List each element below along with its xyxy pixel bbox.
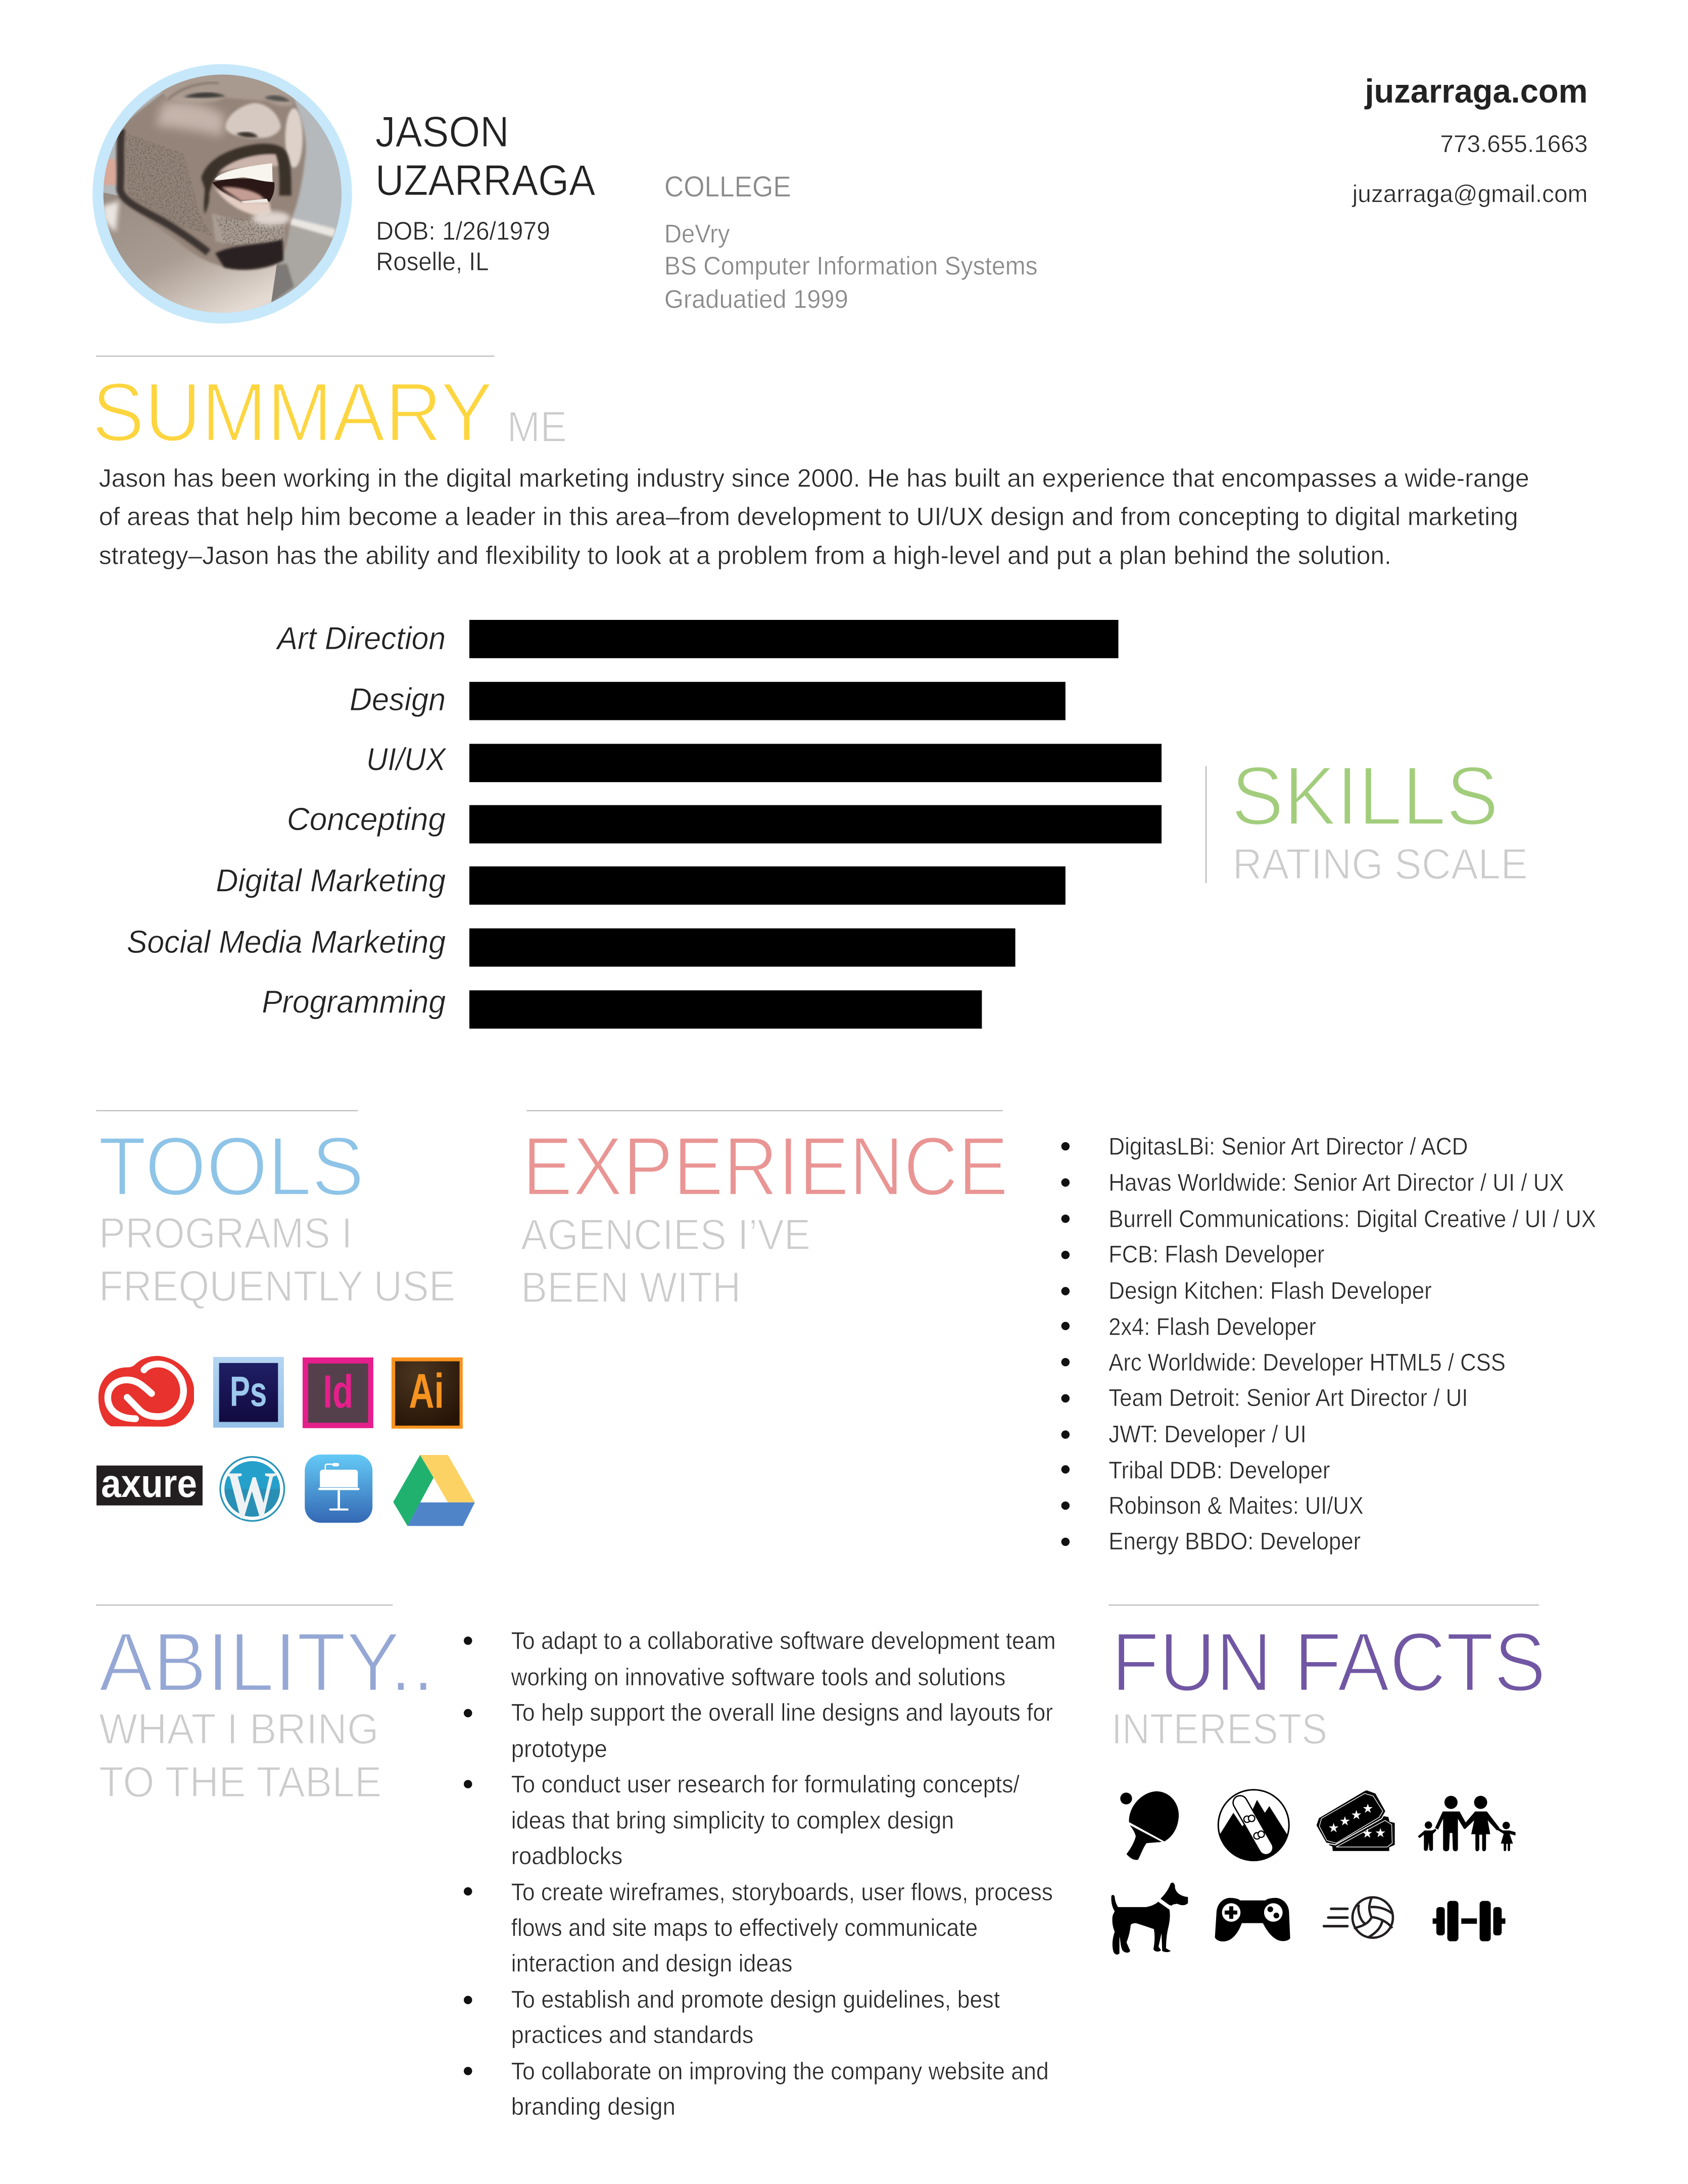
heading: ability: TO THE TABLE — [99, 1758, 381, 1806]
name: UZARRAGA — [375, 157, 595, 205]
skills bar chart: Digital Marketing — [216, 863, 446, 899]
skills bar chart: Social Media Marketing — [127, 925, 446, 960]
photo: laughing portrait in blue ring — [92, 64, 352, 324]
heading: ability: WHAT I BRING — [99, 1706, 379, 1754]
skills bar chart: Design — [350, 682, 446, 717]
skills bar chart: UI/UX — [366, 742, 447, 778]
heading: skills: RATING SCALE — [1233, 841, 1528, 889]
experience list: FCB: Flash Developer — [1108, 1241, 1325, 1268]
summary paragraph — [99, 464, 1529, 570]
tool icons — [97, 1356, 475, 1532]
icon: ping pong paddle — [1120, 1791, 1179, 1860]
name: JASON — [375, 108, 509, 156]
heading: experience: BEEN WITH — [521, 1264, 741, 1312]
experience list: Design Kitchen: Flash Developer — [1108, 1277, 1432, 1304]
experience list: Burrell Communications: Digital Creative / UI / UX — [1108, 1205, 1596, 1233]
tool icons: second column pair — [303, 1357, 475, 1526]
icon: illustrator — [392, 1357, 463, 1429]
heading: tools: TOOLS — [98, 1120, 364, 1213]
heading: fun facts — [1112, 1616, 1546, 1754]
date of birth and location — [376, 216, 550, 276]
skills bar chart: Concepting — [287, 802, 446, 837]
ability list: To collaborate on improving the company website and — [511, 2058, 1049, 2085]
heading: experience — [521, 1120, 1008, 1312]
college: COLLEGE — [664, 171, 791, 203]
skills bar chart — [127, 620, 1162, 1029]
college: BS Computer Information Systems — [664, 251, 1038, 280]
college — [664, 171, 1038, 314]
ability list: roadblocks — [511, 1842, 622, 1870]
ability list: To adapt to a collaborative software development team — [511, 1627, 1056, 1655]
ability list: interaction and design ideas — [511, 1950, 793, 1977]
heading: skills: SKILLS — [1231, 749, 1499, 843]
experience list: 2x4: Flash Developer — [1108, 1314, 1316, 1341]
icon: photoshop: Ps — [230, 1368, 267, 1415]
interest icons: right pair of columns — [1316, 1790, 1516, 1942]
interest icons — [1111, 1790, 1516, 1955]
experience list: Team Detroit: Senior Art Director / UI — [1108, 1384, 1468, 1412]
icon: family — [1418, 1796, 1516, 1851]
heading: experience: EXPERIENCE — [522, 1120, 1008, 1213]
icon: game controller — [1215, 1898, 1290, 1942]
skills bar chart: Art Direction — [275, 621, 446, 656]
heading: skills — [1231, 749, 1528, 889]
ability list: flows and site maps to effectively communicate — [511, 1914, 978, 1942]
experience list: Energy BBDO: Developer — [1108, 1528, 1361, 1555]
contact: juzarraga@gmail.com — [1352, 180, 1588, 208]
experience list: JWT: Developer / UI — [1108, 1421, 1307, 1448]
interest icons: left pair of columns — [1111, 1790, 1290, 1955]
ability list — [464, 1627, 1056, 2120]
icon: wordpress: W — [226, 1458, 277, 1532]
ability list: To establish and promote design guidelines, best — [511, 1986, 1000, 2013]
icon: snowboard in mountains — [1218, 1790, 1289, 1863]
icon: indesign: Id — [323, 1366, 353, 1418]
tool icons: first column pair — [97, 1356, 284, 1532]
icon: keynote — [305, 1454, 372, 1523]
contact: 773.655.1663 — [1440, 130, 1588, 158]
name — [375, 108, 595, 205]
heading: fun facts: FUN FACTS — [1112, 1616, 1546, 1709]
ability list: To create wireframes, storyboards, user flows, process — [511, 1879, 1053, 1906]
icon: dog — [1111, 1883, 1188, 1955]
icon: flying volleyball — [1324, 1898, 1393, 1938]
icon: dumbbell — [1433, 1901, 1506, 1942]
summary paragraph: strategy–Jason has the ability and flexibility to look at a problem from a high-level and put a plan behind the solution. — [99, 542, 1391, 570]
icon: tickets — [1316, 1790, 1395, 1851]
ability list: To help support the overall line designs and layouts for — [511, 1699, 1053, 1726]
skills bar chart: Programming — [262, 984, 446, 1020]
experience list: Tribal DDB: Developer — [1108, 1457, 1330, 1484]
heading: fun facts: INTERESTS — [1112, 1706, 1327, 1754]
icon: creative cloud — [99, 1356, 194, 1427]
summary paragraph: Jason has been working in the digital marketing industry since 2000. He has built an experience that encompasses a wide-range — [99, 464, 1529, 493]
icon: photoshop — [213, 1357, 284, 1428]
contact — [1352, 73, 1588, 208]
heading: ability — [99, 1616, 435, 1806]
icon: illustrator: Ai — [409, 1365, 444, 1419]
ability list: branding design — [511, 2093, 676, 2120]
heading: summary: ME — [507, 403, 567, 451]
icon: indesign — [303, 1357, 373, 1428]
experience list: DigitasLBi: Senior Art Director / ACD — [1108, 1133, 1468, 1160]
ability list: working on innovative software tools and solutions — [511, 1664, 1005, 1691]
date of birth and location: DOB: 1/26/1979 — [376, 216, 550, 245]
college: Graduatied 1999 — [664, 285, 848, 314]
heading: tools: PROGRAMS I — [99, 1209, 352, 1257]
summary paragraph: of areas that help him become a leader in this area–from development to UI/UX design and from concepting to digital marketing — [99, 503, 1518, 531]
ability list: practices and standards — [511, 2021, 753, 2049]
heading: tools — [98, 1120, 455, 1311]
heading: summary: SUMMARY — [92, 366, 493, 459]
ability list: To conduct user research for formulating concepts/ — [511, 1771, 1020, 1798]
college: DeVry — [664, 219, 730, 248]
contact: juzarraga.com — [1364, 73, 1588, 110]
icon: google drive — [393, 1455, 475, 1526]
ability list: prototype — [511, 1735, 607, 1763]
experience list: Havas Worldwide: Senior Art Director / UI / UX — [1108, 1169, 1564, 1196]
heading: tools: FREQUENTLY USE — [99, 1263, 455, 1311]
heading: ability: ABILITY.. — [99, 1616, 435, 1709]
experience list: Robinson & Maites: UI/UX — [1108, 1492, 1364, 1520]
ability list: ideas that bring simplicity to complex design — [511, 1807, 954, 1834]
experience list — [1062, 1133, 1596, 1555]
heading: experience: AGENCIES I’VE — [521, 1211, 810, 1259]
experience list: Arc Worldwide: Developer HTML5 / CSS — [1108, 1349, 1506, 1376]
date of birth and location: Roselle, IL — [376, 247, 489, 276]
icon: axure: axure — [101, 1461, 197, 1506]
